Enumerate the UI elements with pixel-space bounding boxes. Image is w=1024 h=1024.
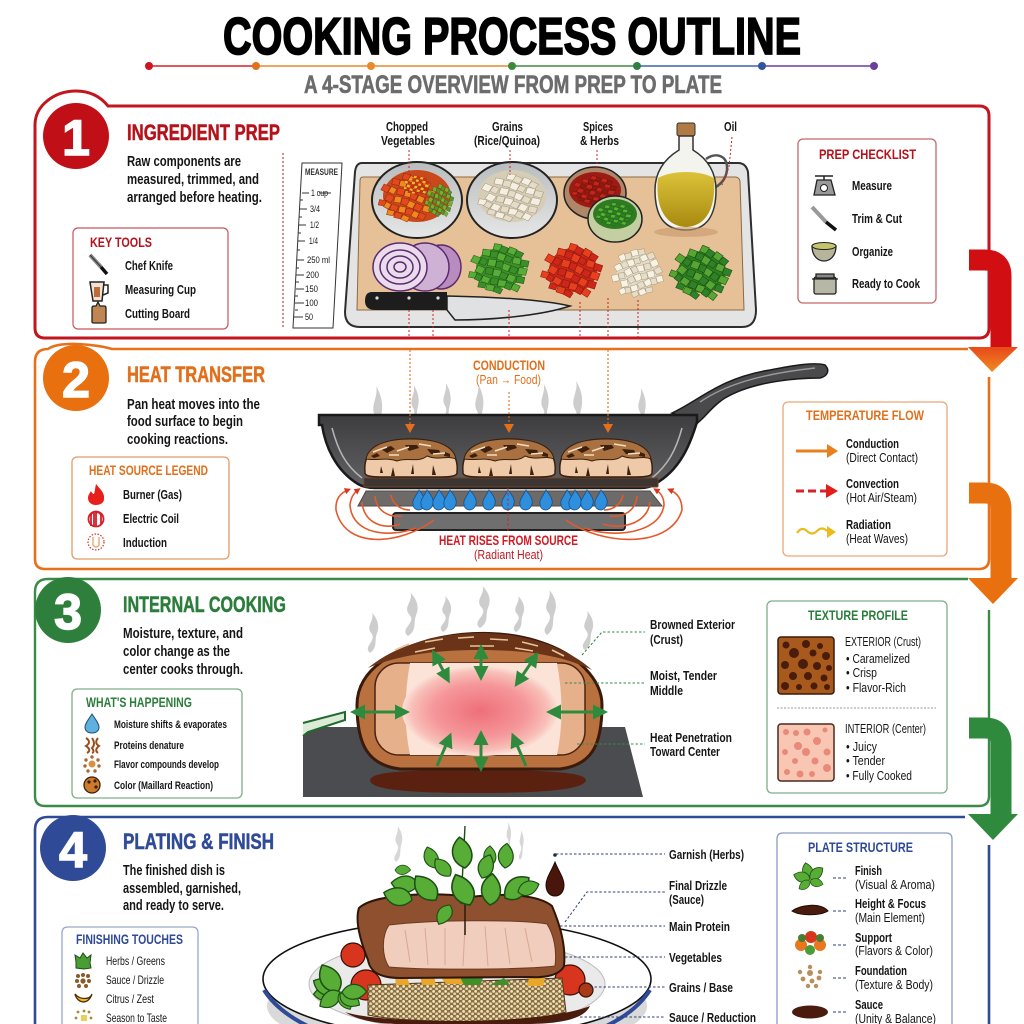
panel: prep checklist: Measure	[852, 179, 892, 193]
measuring ruler: 3/4	[310, 204, 320, 214]
icon: herbs	[75, 953, 91, 969]
description: arranged before heating.	[127, 190, 262, 206]
tray	[345, 163, 756, 327]
panel 2 frame	[35, 344, 989, 569]
panel: plate structure: (Flavors & Color)	[855, 944, 933, 958]
panel: key tools: Chef Knife	[125, 259, 173, 273]
herb garnish	[381, 826, 541, 927]
description: center cooks through.	[123, 662, 243, 678]
swatch: crust	[778, 637, 834, 694]
cooked band	[375, 663, 585, 755]
heading: internal cooking: INTERNAL COOKING	[123, 592, 286, 617]
panel: heat source legend	[72, 457, 229, 559]
description: color change as the	[123, 644, 230, 660]
icon: finish herb sprig	[792, 862, 826, 891]
panel: what's happening: WHAT'S HAPPENING	[86, 694, 192, 710]
icon: chef knife	[90, 255, 107, 274]
panel: plate structure: Finish	[855, 864, 882, 878]
icon: electric coil	[88, 512, 104, 526]
oil bottle	[654, 123, 727, 237]
side greens	[310, 961, 368, 1012]
ingredient labels: Oil	[724, 120, 737, 134]
heat penetration arrows	[356, 650, 602, 766]
pan on burner illustration	[319, 350, 828, 539]
cross-section labels: Toward Center	[650, 745, 720, 759]
pile: white onion	[604, 243, 668, 303]
description: Pan heat moves into the	[127, 397, 260, 413]
panel: texture profile: • Flavor-Rich	[846, 681, 906, 695]
dish labels	[669, 848, 756, 1024]
description: measured, trimmed, and	[127, 172, 259, 188]
dish labels: Main Protein	[669, 920, 730, 934]
measuring ruler: 150	[305, 284, 318, 294]
icon: knife	[812, 207, 836, 230]
pile: red peppers	[534, 236, 609, 305]
panel: texture profile: INTERIOR (Center)	[845, 722, 926, 736]
icon: scale	[814, 176, 835, 195]
stage number 4: 4	[59, 822, 87, 878]
heat waves	[336, 490, 682, 539]
dish labels: Grains / Base	[669, 981, 733, 995]
burner base	[393, 513, 625, 530]
measuring ruler: MEASURE	[305, 167, 338, 177]
panel: what's happening: Color (Maillard Reaction)	[114, 780, 213, 792]
cutting board	[357, 177, 744, 310]
description: Raw components are	[127, 154, 241, 170]
panel: temperature flow: Radiation	[846, 518, 891, 532]
icon: gas flame	[88, 484, 104, 505]
arrow: conduction	[796, 444, 838, 458]
gas flames	[413, 490, 607, 510]
stage number 1: 1	[62, 110, 90, 166]
panel: heat source legend: HEAT SOURCE LEGEND	[89, 462, 208, 478]
cooking food: three patties	[365, 439, 652, 477]
bowl: chopped vegetables	[372, 162, 462, 238]
icon: measuring cup	[90, 282, 108, 301]
description	[127, 397, 260, 448]
swatch: interior	[778, 724, 834, 781]
ingredient labels: & Herbs	[580, 134, 619, 148]
ingredient tray illustration	[345, 123, 756, 327]
panel: what's happening: Moisture shifts & evaporates	[114, 719, 227, 731]
panel: what's happening	[72, 689, 242, 798]
panel: finishing touches: Citrus / Zest	[106, 992, 154, 1006]
cross-section illustration	[303, 586, 643, 797]
panel: prep checklist: Ready to Cook	[852, 277, 920, 291]
panel: texture profile: EXTERIOR (Crust)	[845, 635, 921, 649]
measuring ruler: 200	[306, 270, 319, 280]
panel: texture profile: TEXTURE PROFILE	[808, 607, 908, 623]
panel: texture profile: • Crisp	[846, 666, 877, 680]
cooking surface	[303, 727, 643, 797]
panel: temperature flow: (Heat Waves)	[846, 532, 908, 546]
title: COOKING PROCESS OUTLINE	[223, 8, 801, 66]
panel: texture profile: • Fully Cooked	[846, 769, 912, 783]
measurement reference line	[282, 153, 284, 328]
panel: temperature flow: TEMPERATURE FLOW	[806, 407, 925, 423]
onion slices	[373, 243, 461, 291]
heading: heat transfer: HEAT TRANSFER	[127, 362, 265, 387]
meat outer crust	[357, 633, 602, 769]
panel: temperature flow: (Direct Contact)	[846, 451, 918, 465]
description: and ready to serve.	[123, 898, 224, 914]
stage number 1	[43, 103, 109, 169]
panel: heat source legend: Electric Coil	[123, 512, 179, 526]
arrow: radiation	[797, 526, 836, 538]
icon: induction	[88, 534, 104, 550]
pile: green peppers	[462, 238, 535, 299]
cross-section labels: Middle	[650, 684, 683, 698]
panel: plate structure: (Main Element)	[855, 911, 925, 925]
arrow: stage 3 to stage 4	[968, 728, 1018, 840]
icon: sauce drizzle	[75, 973, 91, 988]
panel: plate structure: (Visual & Aroma)	[855, 878, 935, 892]
description: assembled, garnished,	[123, 881, 241, 897]
stage number 4	[40, 815, 106, 881]
description	[123, 626, 243, 678]
icon: height and focus	[792, 905, 828, 915]
grain base	[368, 976, 566, 1021]
icon: bowl	[812, 242, 836, 261]
seared top crust	[368, 633, 592, 670]
icon: citrus	[75, 994, 92, 1002]
pan base	[364, 478, 658, 487]
panel: temperature flow: Convection	[846, 477, 899, 491]
panel: what's happening: Flavor compounds develop	[114, 759, 219, 771]
arrow: convection	[796, 484, 838, 498]
panel: temperature flow: Conduction	[846, 437, 899, 451]
panel 4 frame	[35, 817, 989, 1024]
panel: heat source legend: Induction	[123, 536, 167, 550]
pink centre	[402, 666, 558, 756]
description: food surface to begin	[127, 414, 243, 430]
description: The finished dish is	[123, 863, 225, 879]
panel: key tools	[73, 228, 228, 329]
panel: prep checklist	[798, 139, 936, 303]
measuring ruler: 1/2	[310, 220, 319, 230]
ingredient labels: Spices	[583, 120, 613, 134]
dish labels: Vegetables	[669, 951, 722, 965]
panel: temperature flow	[783, 402, 947, 556]
conduction arrows	[410, 350, 608, 432]
plate	[263, 920, 651, 1024]
icon: foundation grains	[798, 965, 822, 988]
heading: ingredient prep: INGREDIENT PREP	[127, 120, 280, 145]
cross-section labels: Heat Penetration	[650, 731, 732, 745]
conduction label: (Pan → Food)	[476, 373, 541, 387]
heat rises label: (Radiant Heat)	[474, 548, 543, 562]
ingredient labels: Vegetables	[381, 134, 435, 148]
conduction label: CONDUCTION	[473, 357, 545, 373]
description	[127, 154, 262, 206]
conduction label	[473, 357, 545, 387]
panel 1 frame	[35, 91, 989, 338]
panel: plate structure: Foundation	[855, 964, 907, 978]
stage number 2: 2	[62, 352, 90, 408]
plate well	[309, 938, 605, 1024]
ingredient labels: (Rice/Quinoa)	[474, 134, 540, 148]
measuring ruler: 100	[305, 298, 318, 308]
pile: herbs	[662, 237, 739, 308]
steam	[394, 822, 524, 862]
stage number 3: 3	[54, 584, 82, 640]
pan handle	[672, 364, 828, 425]
panel: texture profile: • Caramelized	[846, 652, 910, 666]
tongs	[303, 712, 345, 736]
plate shadow	[267, 956, 647, 1024]
red leader lines	[409, 137, 732, 338]
panel: plate structure	[777, 833, 952, 1024]
panel: stage 2 heat transfer	[35, 344, 989, 569]
dish labels: Final Drizzle	[669, 879, 727, 893]
measuring ruler	[293, 163, 342, 328]
icon: pot	[812, 274, 838, 294]
arrow: stage 2 to stage 3	[968, 493, 1018, 604]
panel: texture profile	[767, 601, 947, 793]
panel: plate structure: Height & Focus	[855, 897, 926, 911]
ingredient labels: Grains	[492, 120, 523, 134]
panel: stage 3 internal cooking	[35, 577, 989, 806]
panel: plate structure: PLATE STRUCTURE	[808, 839, 913, 855]
measuring ruler: 50	[305, 312, 313, 322]
icon: proteins	[86, 738, 99, 753]
heat rises label: HEAT RISES FROM SOURCE	[439, 532, 578, 548]
sauce pool	[370, 770, 586, 793]
cross-section labels	[650, 618, 735, 759]
measuring ruler: 1 cup	[311, 188, 328, 198]
panel: what's happening: Proteins denature	[114, 740, 184, 752]
panel: plate structure: (Texture & Body)	[855, 978, 933, 992]
dish labels: Garnish (Herbs)	[669, 848, 744, 862]
icon: sauce	[792, 1006, 828, 1018]
panel: key tools: KEY TOOLS	[90, 234, 152, 250]
blue leader lines	[556, 854, 665, 1017]
icon: flavor compounds	[83, 755, 101, 773]
panel: finishing touches: Sauce / Drizzle	[106, 973, 164, 987]
icon: moisture drop	[85, 714, 99, 733]
heading: plating and finish: PLATING & FINISH	[123, 829, 274, 854]
panel: finishing touches: FINISHING TOUCHES	[76, 931, 183, 947]
heat rises label	[439, 532, 578, 562]
stove top plate	[358, 491, 662, 506]
ingredient labels: Chopped	[386, 120, 428, 134]
stage number 2	[43, 345, 109, 411]
tender white zone	[406, 663, 562, 755]
ingredient labels	[381, 120, 737, 148]
icon: support vegetables	[795, 931, 826, 955]
description: Moisture, texture, and	[123, 626, 243, 642]
protein cut face	[383, 921, 556, 969]
dish labels: (Sauce)	[669, 893, 704, 907]
green leader lines	[565, 632, 645, 744]
sauce under base	[345, 1006, 590, 1024]
sauce drop	[546, 862, 564, 896]
bowl: grains	[467, 162, 557, 238]
panel: key tools: Measuring Cup	[125, 283, 196, 297]
panel 3 frame	[35, 579, 989, 806]
icon: seasoning	[75, 1010, 92, 1021]
stage number 3	[35, 577, 101, 643]
panel: key tools: Cutting Board	[125, 307, 190, 321]
cross-section labels: (Crust)	[650, 633, 683, 647]
panel: plate structure: Sauce	[855, 998, 883, 1012]
tomatoes	[341, 943, 593, 1000]
steam	[368, 586, 593, 653]
panel: texture profile: • Tender	[846, 754, 885, 768]
cross-section labels: Browned Exterior	[650, 618, 735, 632]
panel: texture profile: • Juicy	[846, 740, 878, 754]
panel: stage 1 ingredient prep	[35, 91, 989, 338]
panel: heat source legend: Burner (Gas)	[123, 488, 182, 502]
bowl: herbs	[588, 196, 642, 242]
subtitle: A 4-STAGE OVERVIEW FROM PREP TO PLATE	[304, 71, 722, 99]
plated dish illustration	[263, 822, 651, 1024]
description	[123, 863, 241, 914]
chef knife	[365, 292, 570, 320]
steam	[372, 381, 646, 446]
pan body	[319, 415, 697, 488]
timeline divider with coloured dots	[145, 62, 878, 70]
bowl: spices	[564, 167, 626, 219]
arrow: stage 1 to stage 2	[968, 260, 1018, 372]
panel: prep checklist: Organize	[852, 245, 893, 259]
icon: palette color	[84, 777, 100, 793]
panel: finishing touches	[62, 927, 198, 1024]
panel: prep checklist: PREP CHECKLIST	[819, 146, 916, 162]
description: cooking reactions.	[127, 432, 228, 448]
panel: finishing touches: Herbs / Greens	[106, 954, 165, 968]
cross-section labels: Moist, Tender	[650, 669, 717, 683]
measuring ruler: 250 ml	[307, 255, 330, 265]
panel: prep checklist: Trim & Cut	[852, 212, 903, 226]
measuring ruler: 1/4	[309, 236, 318, 246]
panel: temperature flow: (Hot Air/Steam)	[846, 491, 917, 505]
main protein	[358, 894, 564, 978]
icon: cutting board	[92, 302, 106, 323]
panel: plate structure: Support	[855, 931, 893, 945]
panel: stage 4 plating and finish	[35, 815, 989, 1024]
